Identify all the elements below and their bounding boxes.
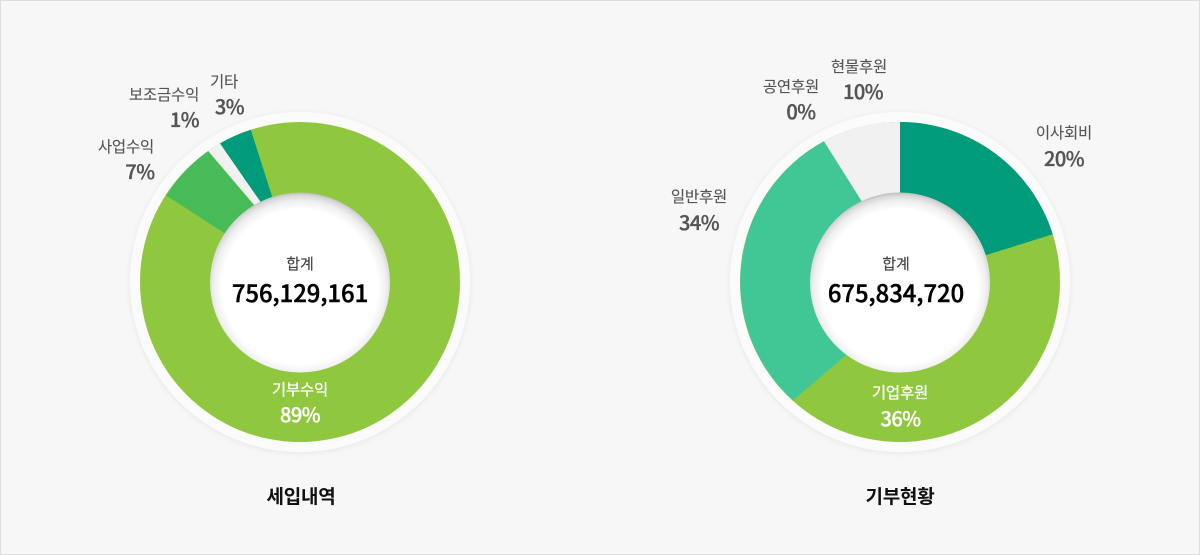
label: performance donation: 공연후원 bbox=[763, 75, 819, 97]
center circle with total: 합계 bbox=[286, 253, 314, 274]
label: in-kind donation: 10% bbox=[843, 76, 884, 105]
label: general donation: 일반후원 bbox=[671, 185, 727, 207]
center circle with total: 합계 bbox=[882, 253, 910, 274]
label: board dues: 이사회비 bbox=[1036, 121, 1092, 143]
center circle with total: 756,129,161 bbox=[232, 274, 368, 309]
label: performance donation bbox=[763, 75, 819, 125]
label: donation income: 기부수익 bbox=[272, 378, 328, 400]
panel: income donut chart bbox=[98, 70, 470, 509]
heading: income breakdown: 세입내역 bbox=[266, 482, 336, 509]
label: in-kind donation: 현물후원 bbox=[831, 55, 887, 77]
donut outer ring bbox=[130, 112, 470, 452]
label: board dues: 20% bbox=[1044, 143, 1085, 172]
label: business income bbox=[98, 135, 155, 185]
label: general donation bbox=[671, 185, 727, 236]
center circle with total bbox=[210, 192, 390, 372]
label: donation income: 89% bbox=[280, 399, 321, 428]
heading: donation status: 기부현황 bbox=[865, 482, 935, 509]
label: general donation: 34% bbox=[679, 207, 720, 236]
label: corporate donation: 기업후원 bbox=[872, 381, 928, 403]
label: subsidy income: 보조금수익 bbox=[129, 83, 199, 105]
label: in-kind donation bbox=[831, 55, 887, 105]
center circle with total bbox=[810, 192, 990, 372]
label: subsidy income bbox=[129, 83, 200, 133]
donut slices bbox=[740, 122, 1060, 442]
donut outer ring bbox=[730, 112, 1070, 452]
label: corporate donation: 36% bbox=[880, 403, 921, 432]
label: business income: 7% bbox=[125, 156, 155, 185]
label: donation income bbox=[272, 378, 328, 428]
label: business income: 사업수익 bbox=[98, 135, 154, 157]
label: corporate donation bbox=[872, 381, 928, 432]
label: board dues bbox=[1036, 121, 1092, 172]
label: subsidy income: 1% bbox=[170, 104, 200, 133]
center circle with total: 675,834,720 bbox=[828, 274, 964, 309]
label: other: 기타 bbox=[210, 70, 238, 92]
label: other: 3% bbox=[215, 91, 245, 120]
panel: donations donut chart bbox=[671, 55, 1092, 509]
label: other bbox=[210, 70, 245, 120]
label: performance donation: 0% bbox=[786, 96, 816, 125]
donut slices bbox=[140, 122, 460, 442]
